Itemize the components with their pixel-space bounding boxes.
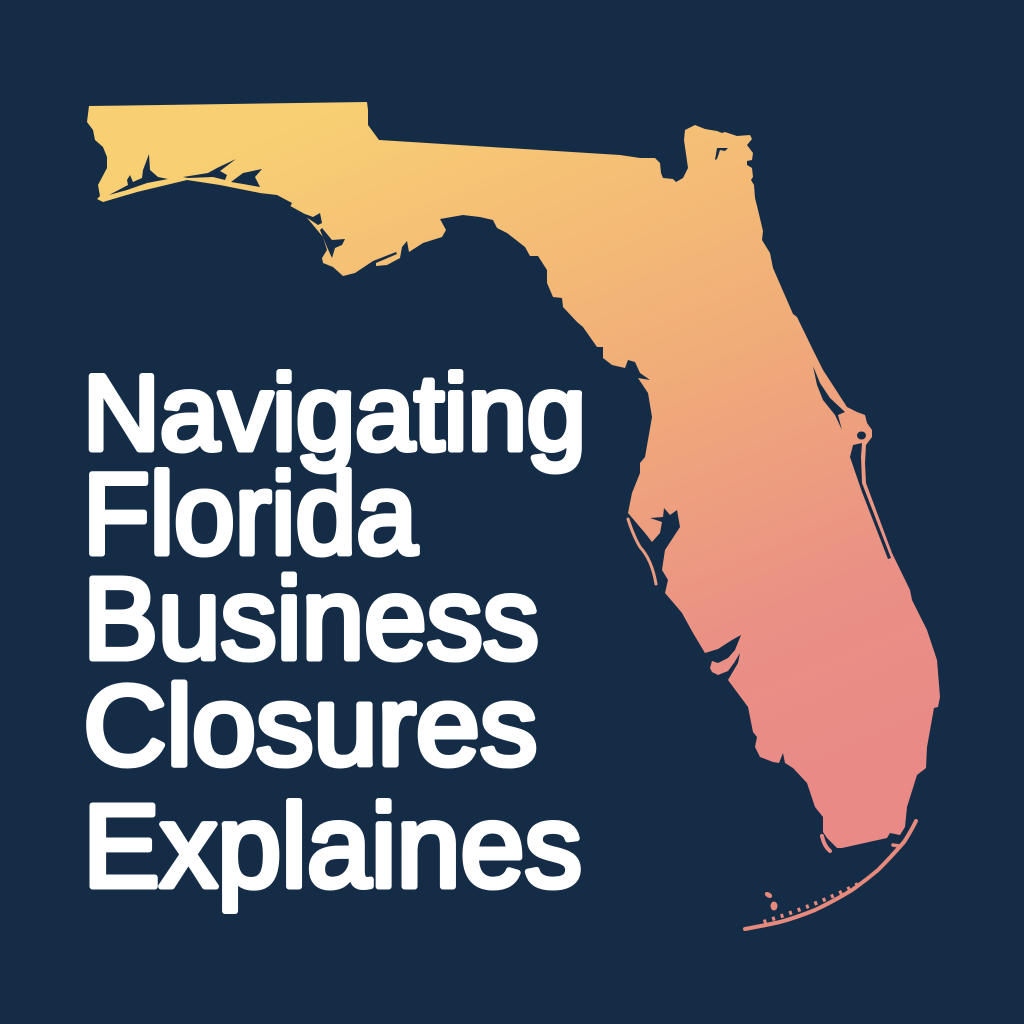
title line 1: Navigating <box>83 352 586 472</box>
title line 5: Explaines <box>83 780 582 912</box>
map: Florida silhouette <box>87 102 940 929</box>
Cape Sable island <box>822 836 830 851</box>
title line 4: Closures <box>83 662 537 788</box>
Atlantic lagoons <box>813 366 845 430</box>
title <box>83 352 586 912</box>
northeast inlet <box>715 148 728 160</box>
Pinellas barrier island <box>628 519 656 584</box>
title line 2: Florida <box>83 451 417 579</box>
panhandle lagoons <box>109 148 891 559</box>
Florida Keys <box>745 821 916 929</box>
state outline <box>87 102 940 848</box>
title line 3: Business <box>83 554 539 684</box>
